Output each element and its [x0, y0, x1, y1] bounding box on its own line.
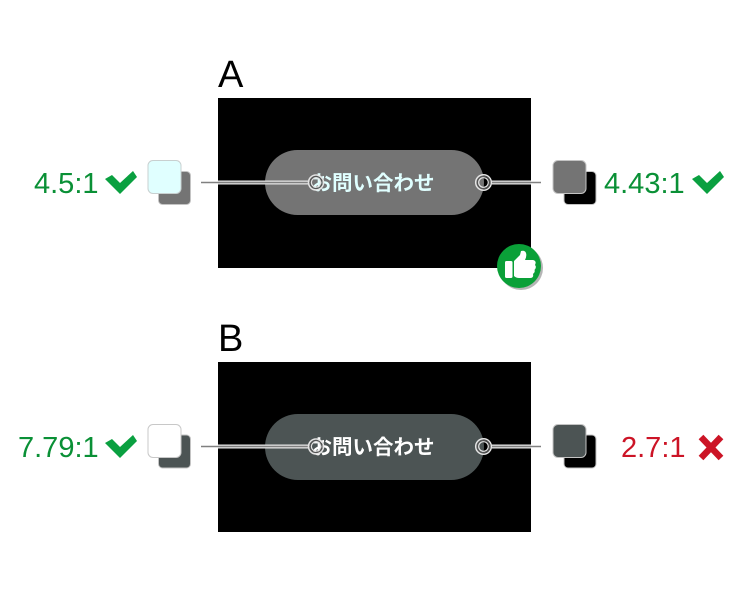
button: variant B: お問い合わせ — [312, 436, 434, 459]
icon: thumbs up badge — [497, 244, 543, 290]
leader line: B text — [201, 439, 324, 454]
heading: A: A — [218, 54, 244, 96]
heading: B: B — [218, 318, 243, 360]
panel: variant B black background — [218, 362, 531, 532]
leader line: B background — [476, 439, 541, 454]
icon: check mark — [105, 435, 137, 458]
swatch pair: A text colours — [148, 160, 190, 204]
leader line: A text — [201, 175, 324, 190]
swatch pair: B text colours — [148, 424, 190, 468]
icon: check mark — [692, 171, 724, 194]
swatch pair: A background colours — [553, 160, 596, 204]
button: variant A — [265, 150, 484, 215]
leader line: A background — [476, 175, 541, 190]
button: variant B — [265, 414, 484, 480]
swatch pair: B background colours — [553, 424, 596, 468]
ratio: B text 7.79:1: 7.79:1 — [18, 432, 99, 464]
ratio: B background 2.7:1: 2.7:1 — [621, 432, 686, 464]
panel: variant A black background — [218, 98, 531, 268]
ratio: A text 4.5:1: 4.5:1 — [34, 168, 98, 200]
icon: check mark — [105, 171, 137, 194]
button: variant A: お問い合わせ — [312, 172, 434, 195]
ratio: A background 4.43:1: 4.43:1 — [604, 168, 685, 200]
icon: cross mark — [701, 437, 721, 458]
